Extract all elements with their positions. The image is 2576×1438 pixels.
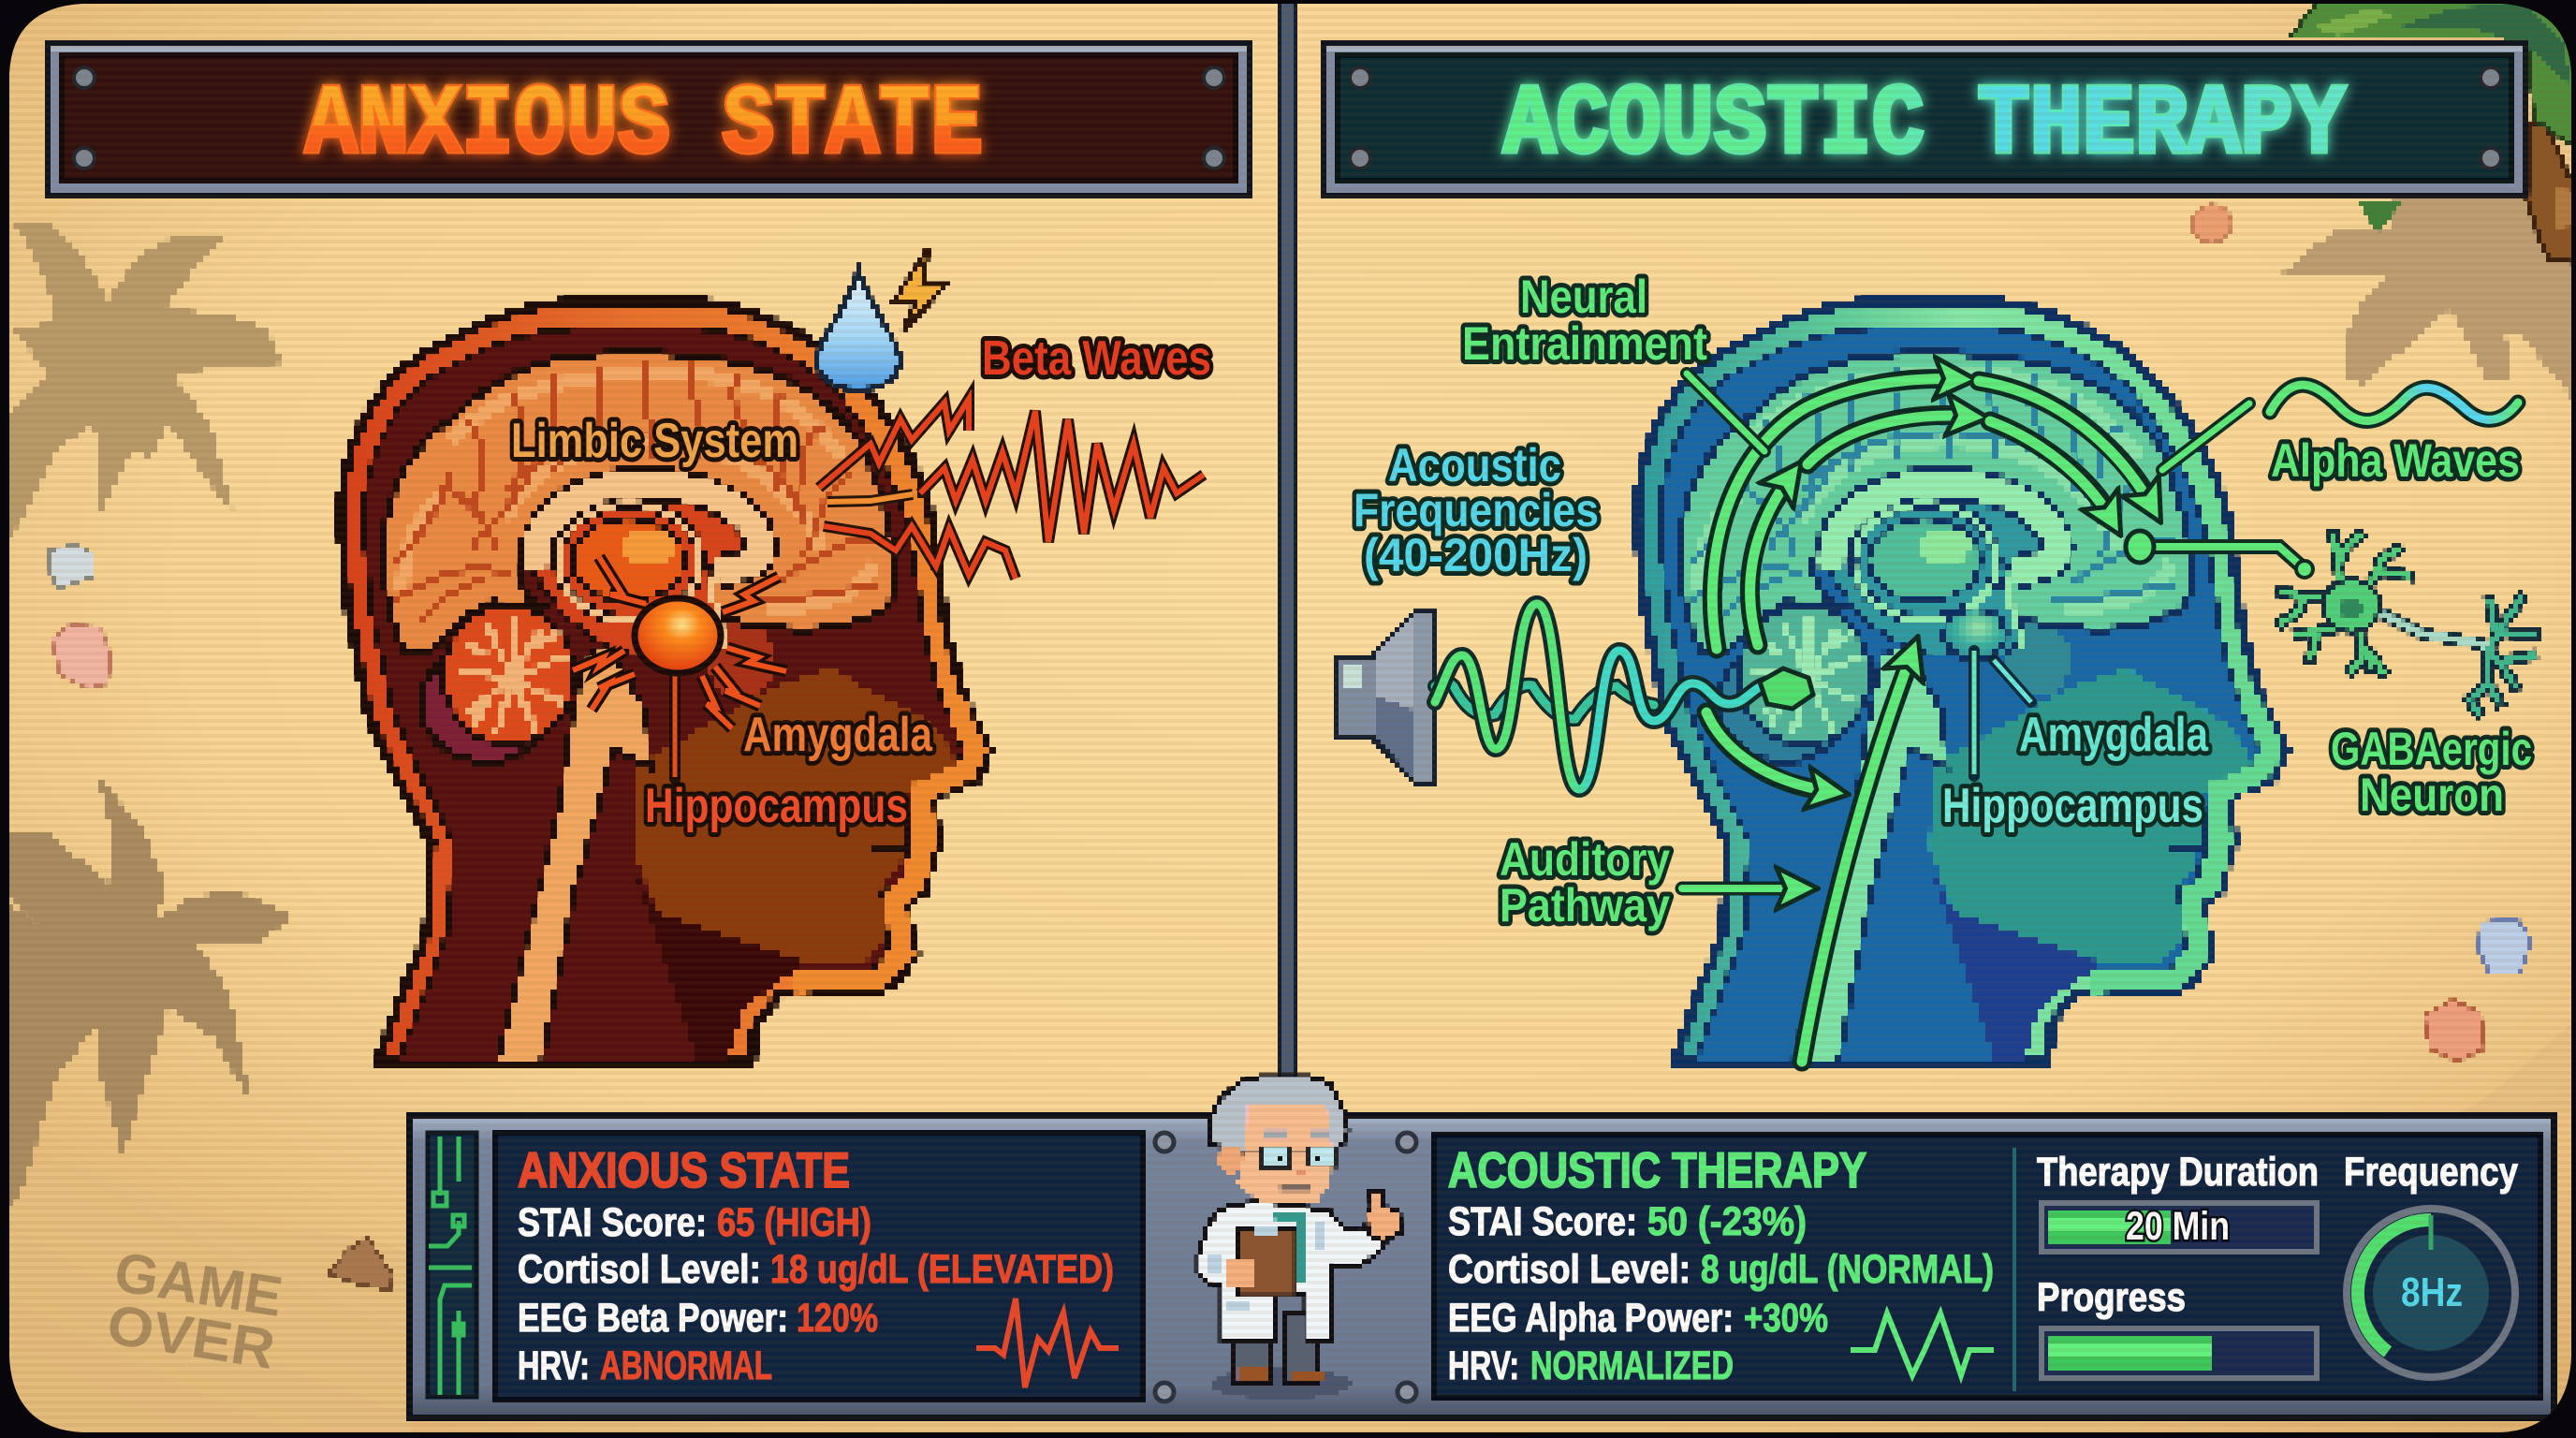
label: acoustic frequencies: Acoustic [1388,439,1561,492]
cortisol level: Cortisol Level: [1448,1247,1690,1292]
label: alpha waves: Alpha Waves [2271,434,2520,487]
mouth [1280,1186,1309,1192]
label: neural entrainment [1462,271,1707,370]
shell: grey pebble [49,545,94,588]
brain stem pons [709,623,774,697]
palm shadow top left [0,220,284,548]
center divider [1278,0,1297,1114]
darker sand patch bottom left [0,1164,412,1438]
lab coat [1198,1201,1385,1342]
cortisol level: 8 ug/dL (NORMAL) [1701,1247,1994,1292]
cerebellum [1718,606,1870,762]
hippocampus pointer colour right [1971,651,1977,774]
hrv [1448,1343,1734,1388]
neuron connector [2126,531,2313,578]
label: amygdala right: Amygdala [2019,708,2209,762]
glasses [1262,1147,1336,1167]
head silhouette [1637,301,2286,1062]
label: hippocampus right: Hippocampus [1942,779,2203,833]
amygdala glow ball [635,598,721,673]
stai score: STAI Score: [518,1200,707,1245]
coat shading [1208,1220,1326,1311]
label: auditory pathway: Pathway [1500,879,1670,932]
brain stem pons [2005,623,2071,697]
hrv: HRV: [518,1343,590,1388]
amygdala pointer right [1994,660,2031,702]
label: neural entrainment: Neural [1520,271,1647,323]
beta waves [819,399,1204,579]
eyebrows [1265,1130,1330,1139]
gauge value: 8Hz [2401,1269,2463,1315]
cortisol level: 18 ug/dL (ELEVATED) [770,1247,1114,1292]
stai score [1448,1199,1807,1244]
eeg beta power: EEG Beta Power: [518,1296,788,1341]
shell: blue right [2479,919,2531,974]
ear blob [1760,668,1813,709]
cerebrum [384,353,895,652]
label: gabaergic neuron [2331,723,2532,821]
shell: pink right [2424,1000,2484,1062]
eeg alpha power: EEG Alpha Power: [1448,1296,1734,1341]
left head: anxious brain [341,301,989,1062]
label: neural entrainment: Entrainment [1462,317,1707,370]
sand text: game over [103,1240,286,1381]
cerebellum [421,606,574,762]
icon: sweat drop [817,271,900,389]
head silhouette [341,301,989,1062]
label: gabaergic neuron: GABAergic [2331,723,2532,775]
eeg alpha power: +30% [1744,1296,1828,1341]
stress bolts around amygdala [573,557,786,728]
label: auditory pathway: Auditory [1500,833,1670,886]
label: therapy duration: Therapy Duration [2037,1150,2319,1195]
icon: lightning bolt [894,248,945,330]
label: acoustic frequencies: (40-200Hz) [1364,529,1588,581]
label: beta waves: Beta Waves [982,331,1211,386]
label: amygdala left: Amygdala [743,708,933,762]
circuit strip [428,1133,476,1397]
stai score: 50 (-23%) [1647,1199,1807,1244]
sand text: game over: OVER [103,1293,279,1381]
label: acoustic frequencies [1354,439,1599,581]
eyes [1276,1154,1321,1159]
cortisol level: Cortisol Level: [518,1247,761,1292]
label: progress: Progress [2037,1275,2186,1320]
palm shadow top right [2281,199,2576,403]
stats title: ANXIOUS STATE [518,1143,850,1198]
screen: anxious stats [495,1133,1143,1400]
icon: gabaergic neuron [2282,536,2534,712]
bottom status panel [406,1112,2557,1421]
cerebrum [1680,353,2191,652]
shell: brown left [328,1238,393,1290]
palm tree top right [2291,0,2576,262]
clipboard clip [1256,1226,1278,1236]
header: acoustic therapy [1321,40,2528,198]
doctor shadow [1210,1369,1351,1399]
face [1237,1105,1332,1203]
screws [1155,1133,1416,1401]
ear [1219,1145,1243,1173]
sand text: game over: GAME [110,1240,286,1328]
doctor legs [1235,1313,1319,1383]
cortisol level [1448,1247,1994,1292]
stats: acoustic therapy [1448,1143,1994,1388]
stai score [518,1200,871,1245]
right hand thumbs-up [1367,1191,1401,1240]
icon: speaker [1337,613,1432,782]
cortisol level [518,1247,1114,1292]
doctor shoes [1238,1368,1326,1380]
shell: orange top right [2192,205,2232,242]
frequency gauge [2347,1209,2515,1377]
glasses bridge [1240,1145,1309,1158]
amygdala ball [1944,609,2006,660]
ecg trace: therapy [1851,1313,1994,1375]
neural entrainment pointer [1687,374,1764,451]
stats title: ACOUSTIC THERAPY [1448,1143,1866,1198]
hrv: HRV: [1448,1343,1519,1388]
hippocampus pointer colour [672,655,678,777]
label: gabaergic neuron: Neuron [2360,769,2504,821]
hrv: ABNORMAL [600,1343,772,1388]
right head: therapy brain [1637,301,2286,1062]
auditory pathway pointer [1682,882,1802,895]
stress bolts colour [573,557,786,728]
hrv: NORMALIZED [1530,1343,1734,1388]
teal scrub and tie [1273,1212,1308,1283]
palm shadow bottom left [0,779,291,1208]
left hand [1227,1259,1255,1285]
doctor character [1198,1077,1401,1399]
label: limbic system: Limbic System [511,414,798,468]
label: acoustic frequencies: Frequencies [1354,484,1599,536]
shell: pink left [51,625,110,688]
ecg trace: anxious [976,1299,1119,1387]
inner brain: corpus and thalamus [1830,484,2056,655]
label: frequency: Frequency [2344,1150,2518,1195]
stats: anxious state [518,1143,1119,1388]
nose [1296,1170,1308,1176]
header: anxious state [45,40,1252,198]
alpha waves pointer [2162,404,2249,470]
screen: therapy stats [1434,1135,2540,1398]
eeg beta power: 120% [797,1296,878,1341]
alpha wave [2270,385,2518,420]
duration bar [2042,1203,2317,1252]
hippocampus pointer line [669,655,681,779]
label: hippocampus left: Hippocampus [645,779,908,833]
inner brain: corpus and thalamus [534,484,760,655]
hippocampus pointer right [1969,651,1980,776]
header title left: ANXIOUS STATE [305,69,983,182]
darker sand patch bottom right [2452,1020,2576,1114]
stai score: 65 (HIGH) [717,1200,871,1245]
header title right: ACOUSTIC THERAPY [1503,69,2346,182]
hrv [518,1343,772,1388]
duration value: 20 Min [2126,1204,2230,1249]
clipboard [1238,1228,1295,1296]
hair [1210,1077,1348,1154]
screen divider [2012,1148,2016,1391]
amygdala pointer colour right [1994,660,2031,702]
label: auditory pathway [1500,833,1670,932]
progress bar [2042,1328,2317,1378]
stai score: STAI Score: [1448,1199,1637,1244]
arrows: neural entrainment flow [1706,379,2153,1062]
acoustic sound wave [1435,604,1769,789]
